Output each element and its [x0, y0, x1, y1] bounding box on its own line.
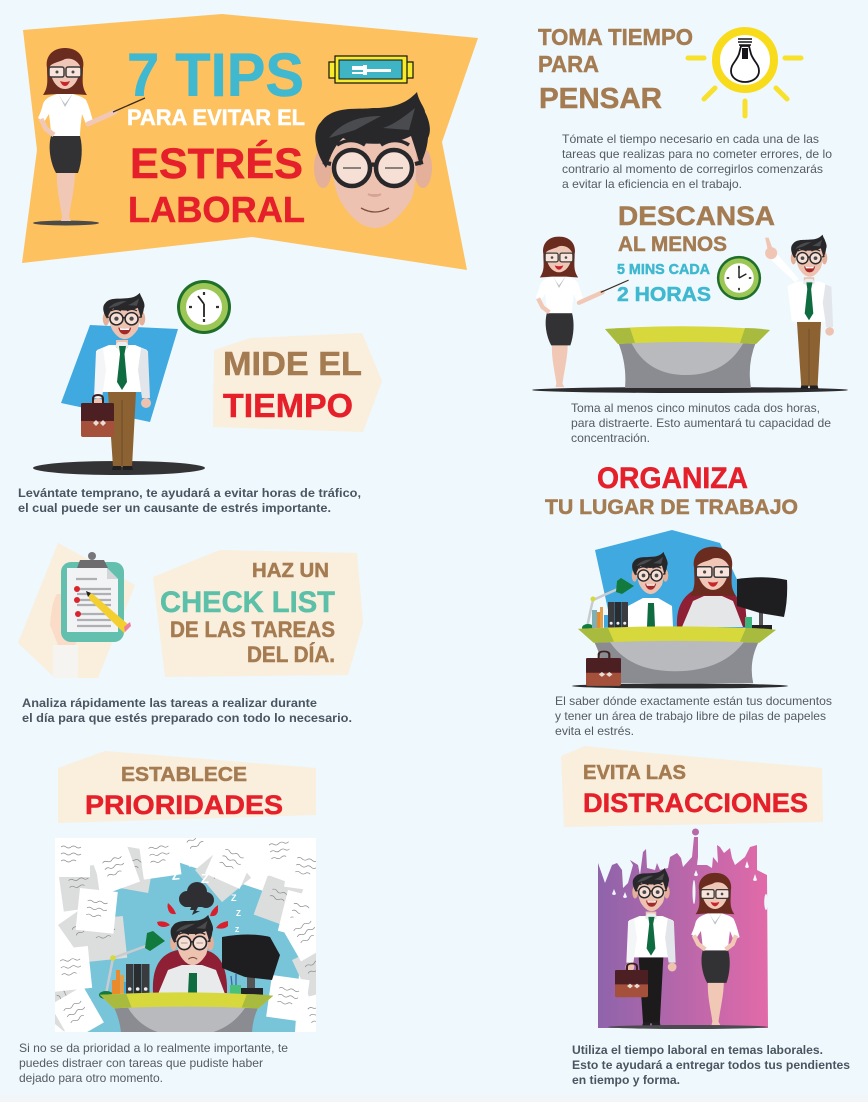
heading: haz un check list: [160, 560, 335, 667]
text: toma tiempo: contrario al momento de corregirlos comenzarás: [562, 162, 823, 176]
heading: establece prioridades: ESTABLECE: [121, 764, 247, 786]
banner: prioridades: [58, 751, 316, 823]
text: toma tiempo: tareas que realizas para no cometer errores, de lo: [562, 147, 832, 161]
heading: haz un check list: DEL DÍA.: [247, 642, 335, 667]
sleep marks: Z: [171, 867, 180, 883]
text: check list: el día para que estés preparado con todo lo necesario.: [22, 711, 352, 725]
text: organiza: [555, 694, 832, 738]
heading: toma tiempo para pensar: TOMA TIEMPO: [538, 24, 693, 50]
character: man with briefcase: [615, 868, 677, 1026]
title: para evitar el: PARA EVITAR EL: [127, 105, 305, 130]
heading: organiza tu lugar de trabajo: TU LUGAR DE TRABAJO: [545, 496, 798, 519]
banner shape: [22, 14, 478, 270]
text: organiza: El saber dónde exactamente están tus documentos: [555, 694, 832, 708]
pale backdrop: [18, 543, 135, 678]
sleep marks: Z: [201, 871, 209, 886]
heading: evita las distracciones: DISTRACCIONES: [583, 788, 808, 818]
pens: [112, 970, 126, 997]
character: woman: [691, 873, 740, 1025]
crowd backdrop: [598, 828, 768, 1028]
woman's chair: [677, 585, 747, 627]
heading: descansa al menos: [617, 201, 775, 306]
shadow: [532, 387, 848, 393]
heading: toma tiempo para pensar: PENSAR: [539, 83, 662, 115]
icon: briefcase: [81, 395, 114, 437]
title: estres: ESTRÉS: [130, 140, 303, 188]
sleep marks: [172, 874, 241, 932]
text: distracciones: Utiliza el tiempo laboral en temas laborales.: [572, 1043, 823, 1057]
text: mide el tiempo: [18, 486, 361, 515]
heading: establece prioridades: PRIORIDADES: [85, 790, 283, 820]
icon: battery: [329, 56, 413, 83]
heading: descansa al menos: 2 HORAS: [617, 284, 711, 306]
icon: binders: [608, 602, 628, 628]
text: descansa: [571, 401, 831, 445]
icon: briefcase: [586, 651, 621, 686]
text: descansa: Toma al menos cinco minutos cada dos horas,: [571, 401, 820, 415]
head: [170, 915, 214, 965]
blue backdrop: [61, 325, 178, 422]
text: prioridades: puedes distraer con tareas que pudiste haber: [19, 1056, 263, 1070]
heading: toma tiempo para pensar: [538, 24, 693, 115]
text: organiza: y tener un área de trabajo libre de pilas de papeles: [555, 709, 826, 723]
character: hurried man: [93, 293, 151, 470]
panel: title banner: [22, 14, 478, 270]
heading: organiza tu lugar de trabajo: [545, 462, 798, 519]
text: mide el tiempo: el cual puede ser un causante de estrés importante.: [18, 501, 331, 515]
text: mide el tiempo: Levántate temprano, te ayudará a evitar horas de tráfico,: [18, 486, 361, 500]
stress cloud: [157, 882, 228, 929]
sleep marks: Z: [231, 893, 237, 903]
character: man at desk: [628, 552, 673, 627]
heading: evita las distracciones: [583, 762, 808, 818]
heading: haz un check list: DE LAS TAREAS: [170, 617, 335, 642]
icon: clock: [177, 280, 231, 334]
shadow: [608, 1025, 768, 1029]
character: woman with pointer: [536, 237, 629, 387]
monitor: [222, 934, 280, 997]
chair: [153, 950, 227, 993]
text: check list: [22, 696, 352, 725]
desk: [100, 992, 274, 1032]
panel: organiza: [545, 462, 832, 738]
icon: clock: [717, 256, 761, 300]
icon: large man face: [314, 92, 432, 228]
panel: toma tiempo: [538, 24, 832, 191]
title: laboral: LABORAL: [128, 189, 305, 230]
heading: organiza tu lugar de trabajo: ORGANIZA: [597, 462, 748, 495]
heading: establece prioridades: [85, 764, 283, 820]
heading: mide el tiempo: TIEMPO: [223, 387, 353, 424]
heading: evita las distracciones: EVITA LAS: [583, 762, 686, 784]
heading: descansa al menos: AL MENOS: [618, 233, 727, 256]
banner: distracciones: [561, 746, 823, 827]
heading: mide el tiempo: [223, 345, 362, 424]
text: distracciones: en tiempo y forma.: [572, 1073, 680, 1087]
text: check list: Analiza rápidamente las tareas a realizar durante: [22, 696, 317, 710]
blue backdrop: [595, 530, 745, 628]
icon: monitor: [737, 577, 787, 633]
panel: distracciones: [561, 746, 850, 1087]
heading: haz un check list: HAZ UN: [252, 560, 329, 582]
binders: [126, 964, 150, 994]
heading: toma tiempo para pensar: PARA: [538, 51, 599, 77]
text: toma tiempo: a evitar la eficiencia en el trabajo.: [562, 177, 742, 191]
shadow: [33, 461, 205, 475]
heading: haz un check list: CHECK LIST: [160, 586, 335, 619]
shirt and tie: [158, 965, 225, 994]
panel: mide el tiempo: [18, 280, 382, 515]
banner: check list: [153, 550, 363, 677]
text: descansa: para distraerte. Esto aumentará tu capacidad de: [571, 416, 831, 430]
icon: pens: [592, 607, 608, 628]
text: distracciones: Esto te ayudará a entregar todos tus pendientes: [572, 1058, 850, 1072]
text: toma tiempo: Tómate el tiempo necesario en cada una de las: [562, 132, 819, 146]
text: descansa: concentración.: [571, 431, 650, 445]
text: prioridades: Si no se da prioridad a lo realmente importante, te: [19, 1041, 288, 1055]
lamp: [99, 931, 165, 999]
icon: desk: [605, 326, 770, 388]
text: prioridades: dejado para otro momento.: [19, 1071, 163, 1085]
banner: mide el tiempo: [213, 333, 382, 432]
text: prioridades: [19, 1041, 288, 1085]
icon: desk: [578, 626, 776, 683]
heading: descansa al menos: 5 MINS CADA: [617, 261, 710, 278]
sleep marks: Z: [236, 909, 241, 918]
shadow: [572, 684, 788, 688]
character: man pointing up: [765, 235, 834, 389]
icon: desk lamp: [582, 578, 634, 632]
character: presenter woman: [33, 48, 145, 226]
text: organiza: evita el estrés.: [555, 724, 634, 738]
icon: clipboard with pencil: [50, 552, 131, 678]
heading: descansa al menos: DESCANSA: [618, 201, 775, 231]
icon: light bulb: [688, 31, 801, 116]
sleep marks: Z: [235, 927, 240, 934]
panel: descansa: [532, 201, 848, 445]
title: 7 tips: 7 TIPS: [127, 41, 304, 109]
panel: prioridades: [19, 751, 344, 1085]
illustration: overwhelmed man among papers: [55, 838, 316, 1032]
character: woman at desk: [682, 547, 743, 627]
papers pile: [55, 838, 316, 1032]
panel: check list: [18, 543, 363, 725]
text: distracciones: [572, 1043, 850, 1087]
heading: mide el tiempo: MIDE EL: [223, 345, 362, 382]
text: toma tiempo: [562, 132, 832, 191]
